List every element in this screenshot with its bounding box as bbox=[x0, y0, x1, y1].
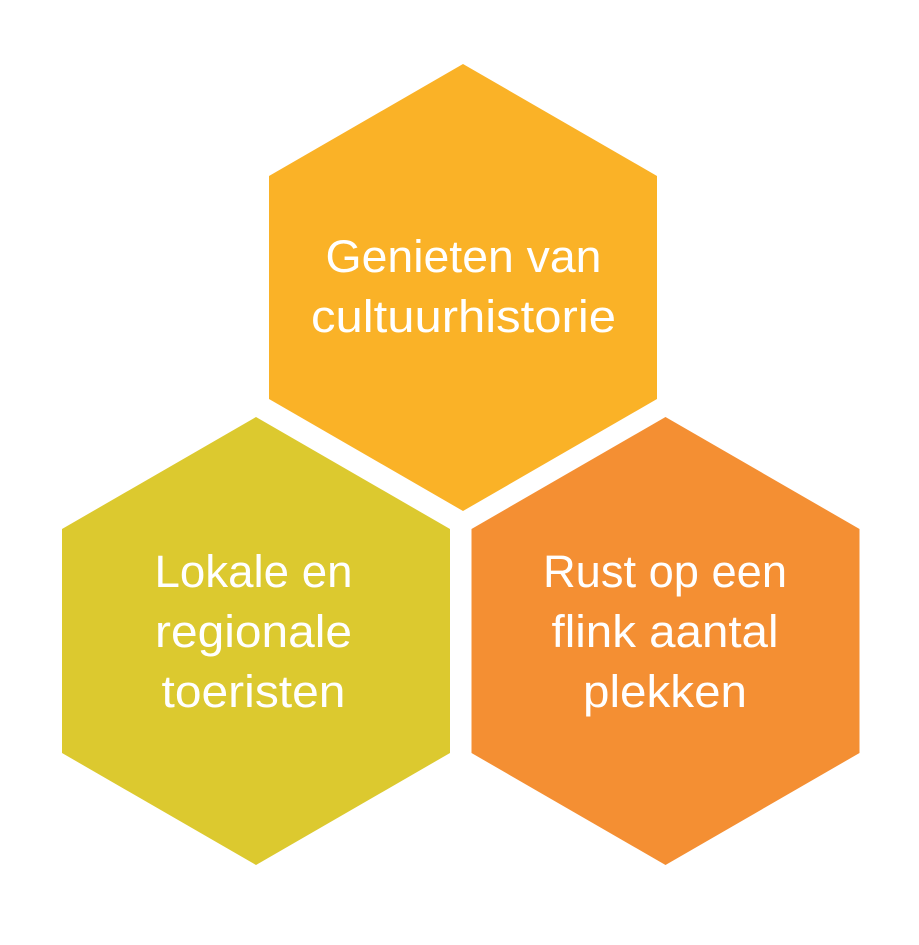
text: Genieten van cultuurhistorie: Genieten van bbox=[326, 231, 602, 282]
text: Genieten van cultuurhistorie: cultuurhistorie bbox=[311, 291, 616, 342]
panel: right hexagon, quiet in many places bbox=[472, 417, 860, 865]
text: Lokale en regionale toeristen: Lokale en bbox=[154, 546, 352, 597]
text: Lokale en regionale toeristen bbox=[154, 546, 352, 717]
text: Rust op een flink aantal plekken: Rust op een bbox=[543, 546, 787, 597]
text: Lokale en regionale toeristen: toeristen bbox=[162, 666, 346, 717]
text: Genieten van cultuurhistorie bbox=[311, 231, 616, 342]
panel: left hexagon, local and regional tourists bbox=[62, 417, 450, 865]
panel: top hexagon, cultural history bbox=[269, 64, 657, 511]
text: Rust op een flink aantal plekken: flink aantal bbox=[552, 606, 778, 657]
text: Rust op een flink aantal plekken: plekken bbox=[583, 666, 747, 717]
text: Rust op een flink aantal plekken bbox=[543, 546, 787, 717]
text: Lokale en regionale toeristen: regionale bbox=[155, 606, 352, 657]
